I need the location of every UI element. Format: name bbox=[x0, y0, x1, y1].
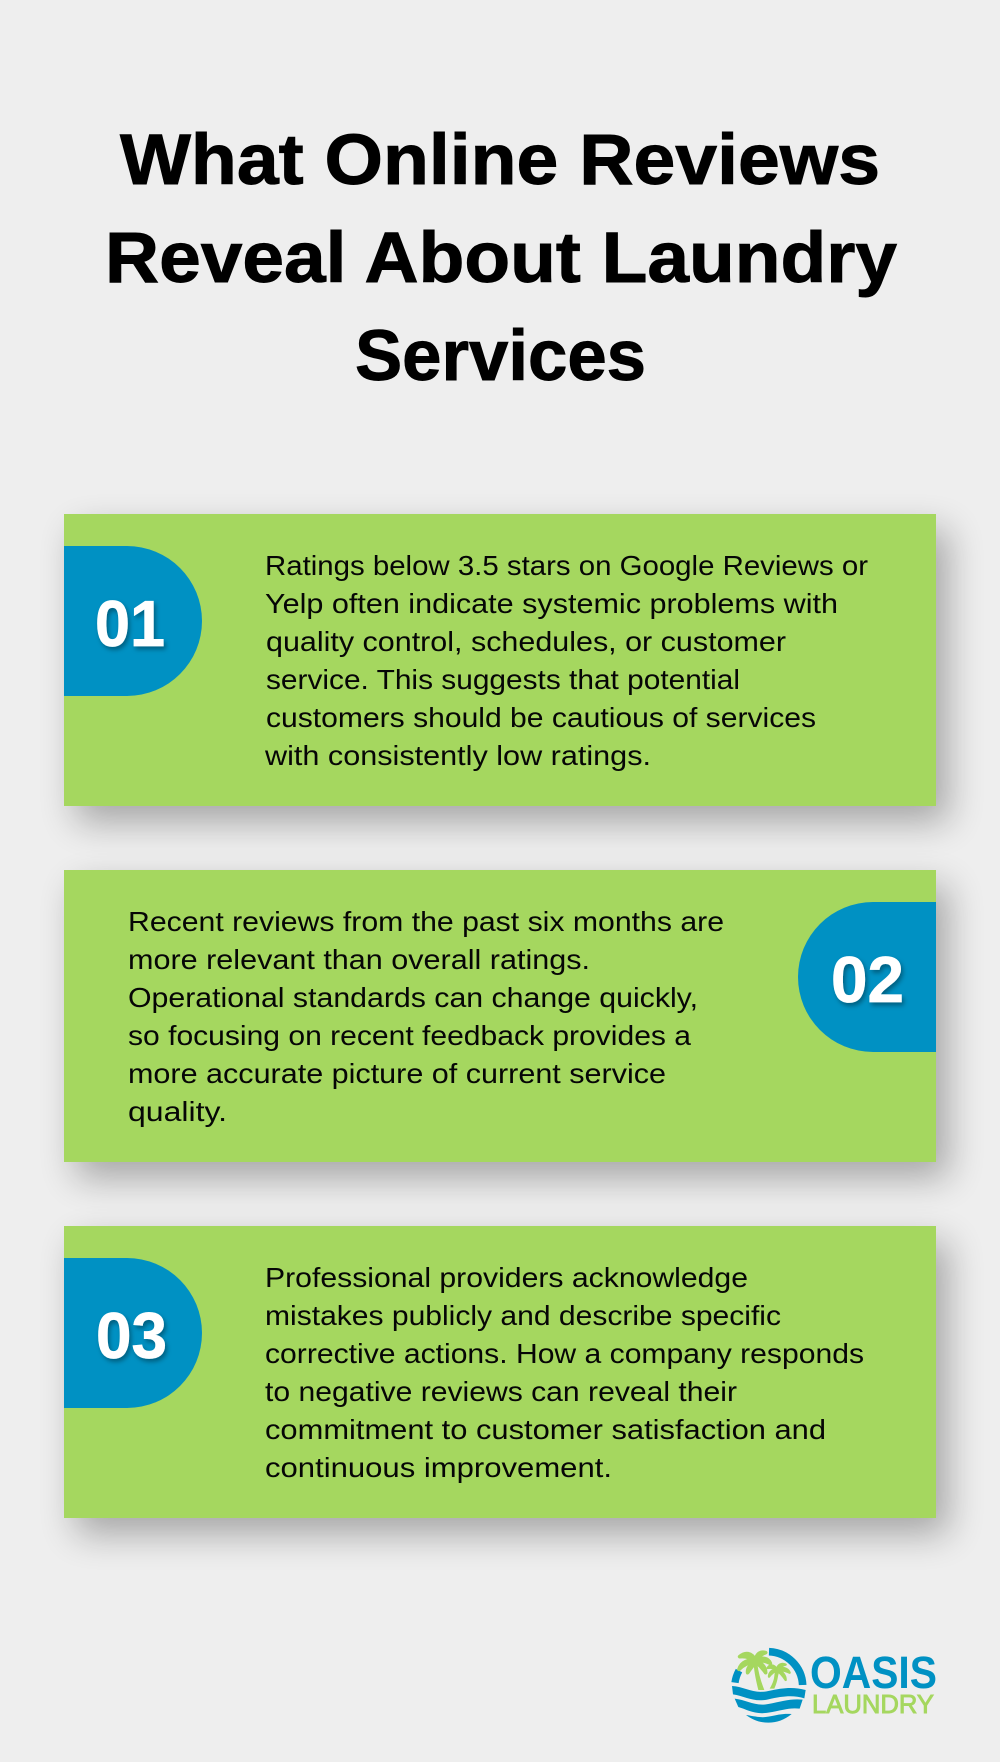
wordmark: LAUNDRY: LAUNDRY bbox=[812, 1689, 934, 1719]
text: tip 01 body: quality control, schedules, or customer bbox=[266, 626, 786, 657]
title: Services bbox=[355, 317, 646, 396]
badge: 03 bbox=[64, 1258, 202, 1408]
text: tip 03 body: corrective actions. How a company responds bbox=[265, 1338, 864, 1369]
text: tip 01 body bbox=[264, 550, 868, 771]
badge: 03: 03 bbox=[96, 1299, 167, 1372]
text: tip 01 body: with consistently low ratings. bbox=[264, 740, 651, 771]
text: tip 02 body: quality. bbox=[128, 1096, 227, 1127]
title: What Online Reviews bbox=[120, 121, 880, 200]
text: tip 01 body: service. This suggests that potential bbox=[266, 664, 740, 695]
text: tip 03 body: continuous improvement. bbox=[265, 1452, 612, 1483]
text: tip 02 body: more relevant than overall ratings. bbox=[128, 944, 590, 975]
text: tip 03 body: to negative reviews can reveal their bbox=[265, 1376, 737, 1407]
text: tip 03 body: Professional providers acknowledge bbox=[265, 1262, 748, 1293]
text: tip 03 body: mistakes publicly and describe specific bbox=[265, 1300, 781, 1331]
text: tip 02 body: Operational standards can change quickly, bbox=[128, 982, 698, 1013]
text: tip 02 body: more accurate picture of current service bbox=[128, 1058, 666, 1089]
text: tip 01 body: Ratings below 3.5 stars on Google Reviews or bbox=[265, 550, 868, 581]
logo: Oasis Laundry bbox=[732, 1647, 937, 1723]
text: tip 01 body: Yelp often indicate systemic problems with bbox=[265, 588, 838, 619]
text: tip 02 body: Recent reviews from the past six months are bbox=[128, 906, 724, 937]
text: tip 03 body bbox=[265, 1262, 864, 1483]
badge: 02 bbox=[798, 902, 936, 1052]
panel: tip 01 low ratings bbox=[64, 514, 948, 822]
text: tip 01 body: customers should be cautious of services bbox=[266, 702, 816, 733]
panel: tip 02 recent reviews bbox=[64, 870, 948, 1178]
badge: 01 bbox=[64, 546, 202, 696]
title bbox=[105, 121, 898, 396]
badge: 01: 01 bbox=[95, 587, 165, 660]
panel: tip 03 responses to negative reviews bbox=[64, 1226, 948, 1534]
text: tip 03 body: commitment to customer satisfaction and bbox=[265, 1414, 826, 1445]
text: tip 02 body: so focusing on recent feedback provides a bbox=[128, 1020, 692, 1051]
text: tip 02 body bbox=[128, 906, 724, 1127]
icon: palm trees and waves bbox=[732, 1652, 806, 1723]
badge: 02: 02 bbox=[831, 943, 904, 1016]
title: Reveal About Laundry bbox=[105, 219, 898, 298]
wordmark: OASIS: OASIS bbox=[810, 1647, 937, 1698]
